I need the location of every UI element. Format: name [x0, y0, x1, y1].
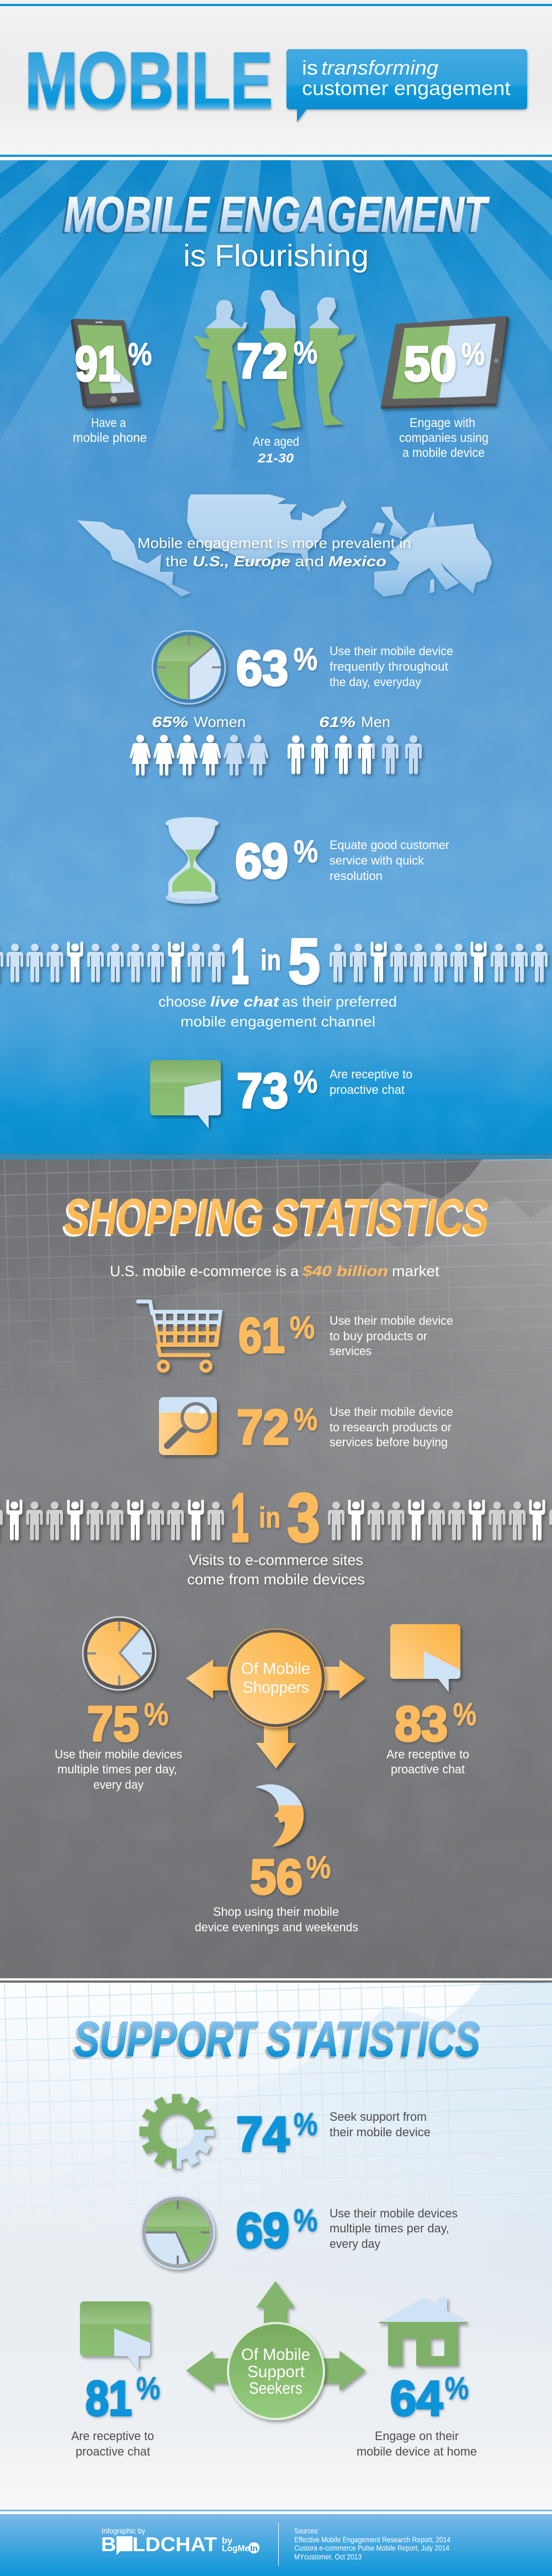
stat: 69% support: 69	[236, 2203, 289, 2258]
stat: 72% shopping	[237, 1399, 317, 1455]
stat: 74%: 74	[236, 2106, 289, 2162]
panel: mobile engagement	[0, 160, 552, 1155]
stat: 72%: 72	[237, 333, 288, 388]
icon: shopping cart	[138, 1302, 222, 1371]
callout: is transforming customer engagement	[286, 49, 527, 122]
stat: 75%	[87, 1696, 168, 1751]
stat: 50%: %	[461, 336, 485, 371]
icon: three people with devices	[193, 290, 355, 429]
text: live chat channel: as their preferred	[282, 993, 397, 1010]
stat: 64%: %	[445, 2370, 469, 2405]
label: 61% men: 61%	[319, 714, 355, 730]
stat: 64%	[390, 2370, 469, 2426]
stat: 1 in 5: 1	[231, 925, 249, 997]
stat: 69%: 69	[235, 833, 288, 888]
icon: tablet	[381, 316, 509, 409]
stat: 1 in 5	[231, 925, 320, 997]
icon: chat bubble 73%	[150, 1060, 221, 1129]
icon: house	[379, 2298, 468, 2366]
text: frequent use: Use their mobile device	[330, 644, 453, 658]
caption: are aged 21-30: 21-30	[257, 451, 294, 465]
stat: 50%: 50	[404, 336, 457, 391]
text: live chat channel: choose	[158, 993, 206, 1010]
stat: 56%	[250, 1849, 331, 1904]
text: sources: Sources:	[294, 2526, 319, 2535]
pictogram: men	[288, 735, 422, 775]
icon: gear	[140, 2094, 214, 2168]
text: frequent use: the day, everyday	[330, 675, 421, 689]
text: frequent use	[330, 644, 453, 689]
text: quick resolution	[330, 838, 449, 883]
text: proactive chat	[386, 1747, 469, 1776]
arrows: mobile shoppers	[186, 1660, 365, 1768]
text: multiple times support: multiple times per day,	[330, 2221, 449, 2235]
text: evenings and weekends: device evenings and weekends	[195, 1920, 358, 1934]
text: mobile engagement prevalence: the	[166, 553, 188, 570]
text: mobile engagement prevalence: Mexico	[328, 553, 386, 570]
text: multiple times support: Use their mobile devices	[330, 2206, 458, 2220]
text: mobile engagement prevalence: Mobile engagement is more prevalent in	[137, 535, 411, 551]
text: quick resolution: Equate good customer	[330, 838, 449, 852]
callout: is transforming customer engagement: is	[302, 56, 318, 79]
stat: 56%: 56	[250, 1849, 302, 1904]
stat: 81%: 81	[86, 2370, 132, 2426]
text: sources	[294, 2526, 450, 2561]
stat: 63%	[236, 640, 317, 696]
stat: 73%	[237, 1063, 317, 1118]
stat: 61%: 61	[238, 1308, 285, 1363]
pictogram: women	[130, 735, 268, 776]
hub: of mobile shoppers	[227, 1629, 325, 1727]
label: 61% men	[319, 714, 390, 730]
callout: is transforming customer engagement: transforming	[321, 56, 438, 79]
caption: have a mobile phone: Have a	[91, 415, 126, 430]
panel: shopping statistics	[0, 1155, 552, 1978]
text: mobile engagement prevalence: U.S., Europe	[193, 553, 290, 570]
text: proactive chat: proactive chat	[391, 1762, 465, 1776]
text: visits to e-commerce sites: Visits to e-commerce sites	[189, 1552, 363, 1568]
text: buy products: Use their mobile device	[330, 1314, 453, 1327]
subheading: is Flourishing: is Flourishing	[183, 238, 369, 273]
text: multiple times support	[330, 2206, 458, 2251]
text: receptive to chat: proactive chat	[330, 1083, 405, 1097]
stat: 83%	[395, 1696, 476, 1751]
panel: support statistics	[0, 1978, 552, 2510]
text: quick resolution: resolution	[330, 869, 383, 883]
text: buy products	[330, 1314, 453, 1358]
text: sources: Custora e-commerce Pulse Mobile Report, July 2014	[294, 2543, 449, 2552]
icon: clock 63%	[152, 631, 225, 704]
stat: 64%: 64	[390, 2370, 443, 2426]
logo: BoldChat by LogMeIn: BOLDCHAT	[101, 2533, 217, 2556]
logo: BoldChat by LogMeIn: In	[250, 2544, 258, 2553]
text: visits to e-commerce sites: come from mobile devices	[187, 1571, 365, 1588]
text: evenings and weekends: Shop using their mobile	[213, 1905, 339, 1919]
stat: 63%: 63	[236, 640, 288, 696]
text: receptive to chat	[330, 1067, 412, 1097]
caption: engage with companies	[399, 415, 489, 460]
stat: 50%	[404, 336, 485, 391]
arrows: support seekers	[186, 2281, 365, 2391]
text: buy products: to buy products or	[330, 1329, 427, 1343]
icon: clock 69%	[141, 2196, 214, 2269]
caption: engage with companies: companies using	[399, 430, 489, 445]
text: sources: Effective Mobile Engagement Research Report, 2014	[294, 2535, 450, 2544]
stat: 73%: 73	[237, 1063, 288, 1118]
text: evenings and weekends	[195, 1905, 358, 1934]
map: US, Mexico, Europe	[77, 494, 492, 597]
callout: is transforming customer engagement: customer engagement	[302, 77, 511, 99]
text: multiple times per day: Use their mobile devices	[55, 1747, 182, 1761]
caption: are aged 21-30: Are aged	[253, 434, 299, 449]
text: multiple times per day: multiple times per day,	[57, 1762, 177, 1776]
text: live chat channel	[158, 993, 397, 1030]
text: engage at home	[357, 2429, 477, 2458]
text: frequent use: frequently throughout	[330, 660, 448, 673]
sunburst rays	[0, 160, 552, 497]
logo: BoldChat by LogMeIn: by	[222, 2536, 232, 2546]
hub: of mobile shoppers: Of Mobile	[241, 1660, 310, 1678]
stat: 91%: %	[128, 336, 152, 371]
label: 65% women: Women	[194, 714, 246, 730]
text: multiple times support: every day	[330, 2237, 380, 2251]
stat: 74%	[236, 2106, 317, 2162]
text: live chat channel: mobile engagement channel	[181, 1013, 375, 1030]
icon: hourglass	[166, 817, 219, 904]
text: $40 billion market: market	[392, 1263, 440, 1279]
text: research products	[330, 1405, 453, 1449]
text: multiple times per day	[55, 1747, 182, 1792]
text: infographic by: Infographic by	[102, 2526, 145, 2535]
text: seek support	[330, 2110, 431, 2139]
stat: 72%: %	[294, 335, 317, 370]
text: $40 billion market: U.S. mobile e-commerce is a	[110, 1263, 299, 1279]
logo: BoldChat by LogMeIn: LogMe	[222, 2544, 250, 2553]
stat: 72%	[237, 333, 317, 388]
pictogram row: 1 in 3	[0, 1499, 552, 1540]
stat: 69%: %	[294, 834, 318, 868]
text: receptive to chat: Are receptive to	[330, 1067, 412, 1081]
stat: 69% support: %	[294, 2203, 317, 2237]
hub: of mobile support seekers: Support	[247, 2363, 305, 2381]
label: 61% men: Men	[361, 714, 390, 730]
stat: 75%: 75	[87, 1696, 139, 1751]
text: mobile engagement prevalence: and	[295, 553, 324, 570]
hub: of mobile shoppers: Shoppers	[243, 1679, 309, 1697]
stat: 1 in 5: in	[261, 944, 281, 977]
stat: 69%	[235, 833, 318, 888]
icon: chat bubble 83%	[390, 1624, 460, 1692]
caption: have a mobile phone: mobile phone	[73, 430, 147, 445]
stat: 69% support	[236, 2203, 317, 2258]
stat: 81%: %	[136, 2370, 160, 2405]
icon: crescent moon	[255, 1784, 304, 1846]
stat: 83%: 83	[395, 1696, 448, 1751]
logo: BoldChat by LogMeIn	[101, 2533, 259, 2556]
caption: engage with companies: Engage with	[410, 415, 475, 430]
hub: of mobile support seekers	[228, 2323, 324, 2419]
icon: magnifier tile	[159, 1397, 217, 1455]
stat: 91%: 91	[75, 336, 120, 391]
panel: header	[0, 0, 552, 160]
stat: 1 in 3: 3	[287, 1480, 320, 1556]
text: quick resolution: service with quick	[330, 854, 424, 867]
text: $40 billion market: $40 billion	[302, 1263, 388, 1279]
text: seek support: Seek support from	[330, 2110, 427, 2124]
stat: 61%: %	[290, 1310, 315, 1345]
stat: 83%: %	[453, 1697, 476, 1731]
icon: clock 75%	[83, 1617, 156, 1690]
text: visits to e-commerce sites	[187, 1552, 365, 1588]
text: engage at home: mobile device at home	[357, 2445, 477, 2458]
text: engage at home: Engage on their	[375, 2429, 459, 2443]
stat: 1 in 3: in	[259, 1502, 280, 1534]
stat: 72% shopping: %	[294, 1402, 317, 1436]
text: proactive chat: Are receptive to	[386, 1747, 469, 1761]
text: live chat channel: live chat	[210, 993, 280, 1010]
text: research products: Use their mobile device	[330, 1405, 453, 1419]
text: multiple times per day: every day	[93, 1778, 144, 1792]
stat: 1 in 5: 5	[288, 925, 320, 997]
caption: are aged 21-30	[253, 434, 299, 465]
stat: 1 in 3: 1	[231, 1480, 249, 1556]
label: 65% women	[152, 714, 246, 730]
text: mobile engagement prevalence	[137, 535, 411, 570]
caption: engage with companies: a mobile device	[402, 445, 485, 460]
stat: 63%: %	[294, 641, 317, 676]
stat: 74%: %	[294, 2106, 317, 2141]
text: receptive support: Are receptive to	[71, 2429, 154, 2443]
stat: 75%: %	[144, 1697, 168, 1731]
text: research products: services before buying	[330, 1435, 448, 1449]
icon: phone	[71, 319, 140, 409]
icon: chat bubble 81%	[80, 2301, 150, 2370]
hub: of mobile support seekers: Seekers	[249, 2379, 302, 2398]
text: seek support: their mobile device	[330, 2125, 431, 2139]
text: sources: MYcustomer, Oct 2013	[294, 2552, 362, 2561]
text: research products: to research products or	[330, 1420, 452, 1434]
pictogram row: 1 in 5	[0, 941, 548, 982]
text: buy products: services	[330, 1344, 371, 1358]
text: receptive support	[71, 2429, 154, 2458]
hub: of mobile support seekers: Of Mobile	[241, 2346, 310, 2364]
stat: 72% shopping: 72	[237, 1399, 289, 1455]
stat: 1 in 3	[231, 1480, 320, 1556]
caption: have a mobile phone	[73, 415, 147, 445]
stat: 56%: %	[306, 1850, 331, 1884]
label: 65% women: 65%	[152, 714, 188, 730]
stat: 73%: %	[294, 1064, 317, 1099]
title: MOBILE: MOBILE	[25, 36, 273, 125]
panel: footer	[0, 2510, 552, 2576]
text: $40 billion market	[110, 1263, 440, 1279]
text: receptive support: proactive chat	[76, 2445, 150, 2458]
